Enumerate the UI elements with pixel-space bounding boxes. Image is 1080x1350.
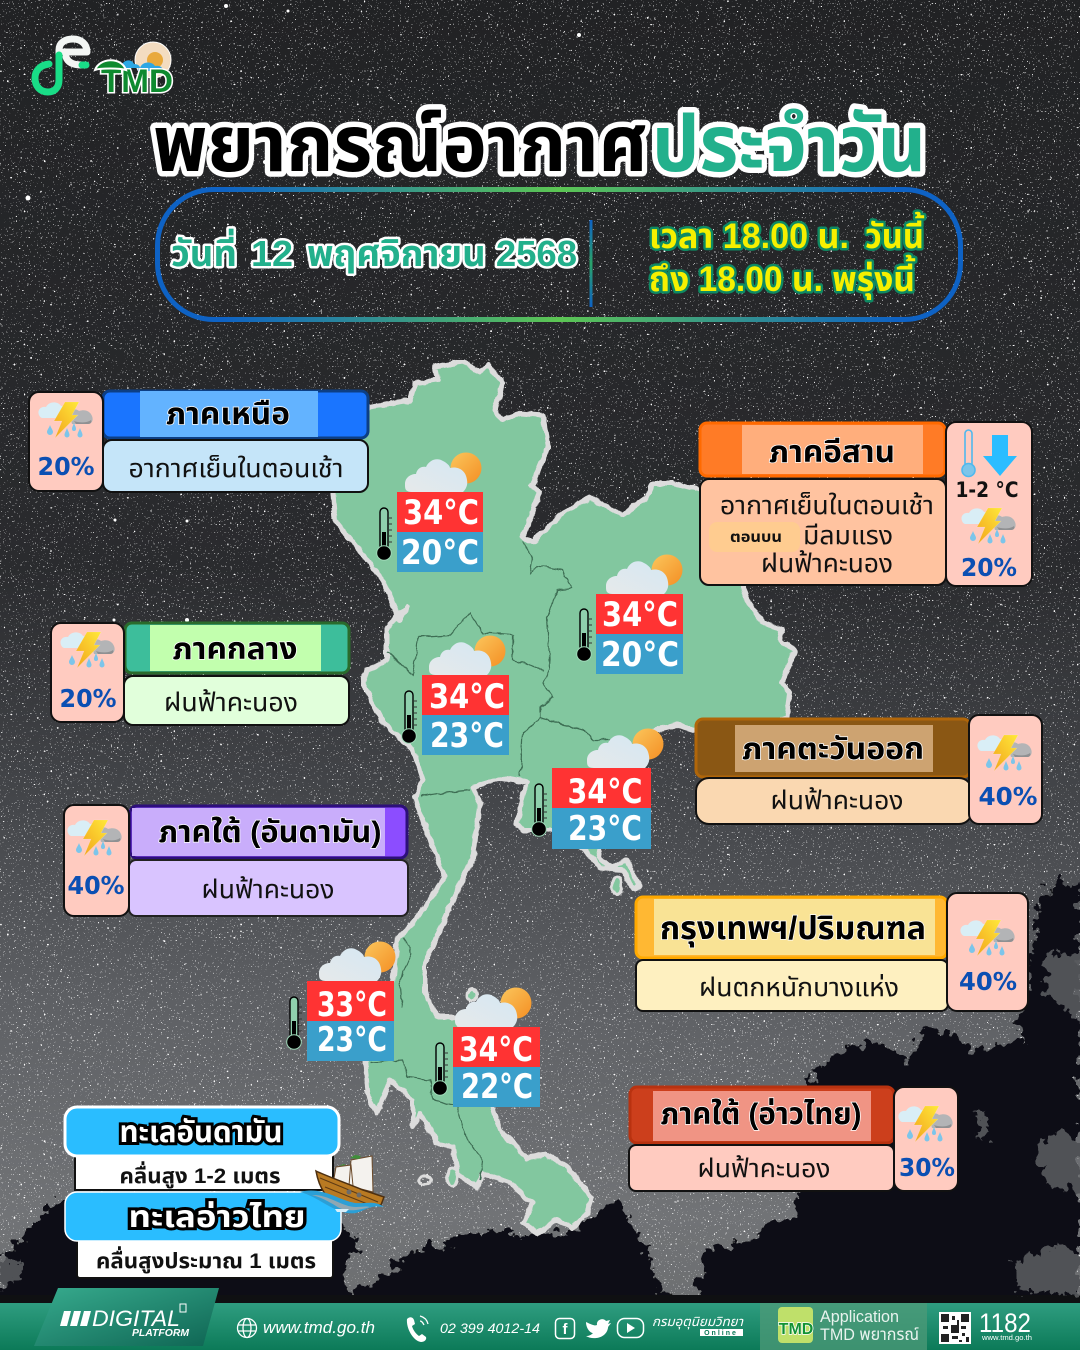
central description: ฝนฟ้าคะนอง: [164, 687, 298, 717]
Gulf sea heading: [65, 1192, 341, 1241]
application panel: TMD พยากรณ์: [820, 1325, 919, 1344]
Andaman sea wave: คลื่นสูง 1-2 เมตร: [120, 1161, 281, 1189]
Bangkok rain chance: 40%: [959, 967, 1017, 996]
panel: Bangkok and vicinity: [636, 893, 1028, 1011]
phone number: 02 399 4012-14: [440, 1321, 540, 1336]
Andaman rain chance: 40%: [68, 871, 124, 900]
Andaman description: ฝนฟ้าคะนอง: [202, 874, 334, 904]
panel: north region: ภาคเหนือ: [166, 398, 290, 431]
northeast description: ฝนฟ้าคะนอง: [761, 548, 893, 578]
north rain chance: [29, 392, 103, 491]
temperature: east: [532, 728, 664, 849]
northeast side card: temperature drop and rain chance: 20%: [961, 553, 1017, 582]
website: www.tmd.go.th: [263, 1318, 375, 1337]
forecast time text: เวลา 18.00 น.: [649, 217, 849, 256]
map of Thailand: [330, 362, 795, 1233]
temperature: east: 23°C: [568, 809, 642, 849]
phone number: [407, 1316, 540, 1342]
title: ประจำวัน: [652, 100, 926, 188]
digital platform badge: [34, 1288, 219, 1346]
icon: down arrow: [983, 435, 1017, 476]
northeast side card: temperature drop and rain chance: [946, 422, 1032, 586]
icon: TMD logo: TMD: [101, 63, 173, 99]
application panel: Application: [820, 1307, 899, 1326]
panel: northeast region: ภาคอีสาน: [769, 436, 895, 469]
temperature: east: 34°C: [568, 772, 642, 812]
east description: [696, 778, 972, 824]
Bangkok description: ฝนตกหนักบางแห่ง: [699, 972, 899, 1002]
Gulf sea wave: คลื่นสูงประมาณ 1 เมตร: [96, 1246, 316, 1274]
north rain chance: 20%: [38, 452, 94, 481]
application panel: TMD: [779, 1321, 813, 1338]
temperature: Andaman: 23°C: [317, 1020, 387, 1060]
northeast description: มีลมแรง: [803, 520, 893, 550]
temperature: Andaman: 33°C: [317, 985, 387, 1025]
date text: 12: [251, 233, 293, 274]
panel: south Andaman region: [64, 805, 408, 916]
panel: north region: [29, 391, 368, 492]
Andaman sea heading: ทะเลอันดามัน: [120, 1116, 282, 1149]
footer bar: [0, 1288, 1080, 1350]
department name: กรมอุตุนิยมวิทยา: [652, 1314, 744, 1330]
temperature: north: [377, 452, 483, 573]
temperature: central: 34°C: [429, 677, 505, 717]
temperature: Andaman: [287, 942, 396, 1061]
central rain chance: 20%: [60, 684, 116, 713]
date text: พฤศจิกายน 2568: [307, 233, 577, 274]
Gulf sea wave: [77, 1236, 333, 1278]
panel: east region: ภาคตะวันออก: [742, 733, 924, 766]
Gulf sea heading: ทะเลอ่าวไทย: [128, 1201, 306, 1234]
Andaman sea wave: [75, 1150, 333, 1190]
central rain chance: [51, 623, 124, 722]
panel: east region: [696, 715, 1042, 824]
panel: northeast region: [700, 422, 1032, 586]
panel: central region: ภาคกลาง: [172, 633, 298, 666]
panel: south Gulf region: [629, 1087, 958, 1191]
department name: [652, 1314, 744, 1337]
Gulf rain chance: [894, 1087, 958, 1191]
temperature: central: [402, 636, 509, 756]
northeast description: [700, 479, 946, 585]
temperature: northeast: [577, 554, 683, 675]
digital platform badge: PLATFORM: [132, 1328, 190, 1339]
Gulf description: [629, 1145, 894, 1191]
northeast side card: temperature drop and rain chance: 1-2 °C: [956, 478, 1018, 502]
temperature: central: 23°C: [430, 716, 504, 756]
social icons: [556, 1318, 644, 1338]
panel: south Gulf region: ภาคใต้ (อ่าวไทย): [660, 1098, 862, 1131]
logos: DE and TMD: [35, 39, 173, 99]
northeast description: ตอนบน: [730, 529, 782, 546]
Gulf description: ฝนฟ้าคะนอง: [698, 1153, 830, 1183]
temperature: north: 20°C: [401, 533, 479, 573]
panel: sea conditions: [65, 1107, 384, 1278]
QR code: [939, 1312, 971, 1344]
Bangkok rain chance: [947, 893, 1028, 1011]
northeast description: อากาศเย็นในตอนเช้า: [720, 490, 934, 520]
east description: ฝนฟ้าคะนอง: [770, 785, 904, 815]
icon: sailing ship: [300, 1155, 384, 1213]
forecast time text: [649, 211, 925, 300]
date text: วันที่: [171, 228, 237, 274]
date and time panel: [158, 190, 960, 320]
digital platform badge: DIGITAL: [92, 1306, 180, 1331]
department name: Online: [704, 1330, 738, 1337]
forecast time text: วันนี้: [865, 211, 925, 256]
Gulf rain chance: 30%: [899, 1153, 955, 1182]
title: [153, 100, 926, 188]
Andaman rain chance: [64, 805, 129, 916]
panel: Bangkok and vicinity: กรุงเทพฯ/ปริมณฑล: [660, 910, 926, 947]
temperature: Gulf: 22°C: [461, 1067, 533, 1107]
hotline 1182: www.tmd.go.th: [981, 1335, 1032, 1342]
date text: [171, 228, 577, 274]
east rain chance: 40%: [978, 782, 1038, 811]
temperature: north: 34°C: [403, 493, 479, 533]
icon: blue thermometer: [962, 430, 975, 476]
forecast time text: ถึง 18.00 น. พรุ่งนี้: [649, 254, 916, 300]
temperature: northeast: 34°C: [602, 595, 678, 635]
central description: [124, 676, 349, 725]
panel: central region: [51, 623, 349, 725]
temperature: Gulf: [433, 988, 540, 1107]
hotline 1182: 1182: [979, 1308, 1031, 1338]
Andaman description: [129, 860, 408, 916]
social icons: f: [562, 1321, 568, 1338]
Bangkok description: [636, 960, 948, 1011]
title: พยากรณ์อากาศ: [153, 100, 648, 188]
east rain chance: [969, 715, 1042, 824]
panel: south Andaman region: ภาคใต้ (อันดามัน): [158, 816, 382, 849]
north description: อากาศเย็นในตอนเช้า: [128, 453, 344, 483]
temperature: Gulf: 34°C: [459, 1030, 533, 1070]
temperature: northeast: 20°C: [601, 635, 679, 675]
application panel: [760, 1303, 927, 1350]
north description: [103, 440, 368, 492]
Andaman sea heading: [65, 1107, 339, 1156]
icon: DE logo: [35, 39, 87, 92]
